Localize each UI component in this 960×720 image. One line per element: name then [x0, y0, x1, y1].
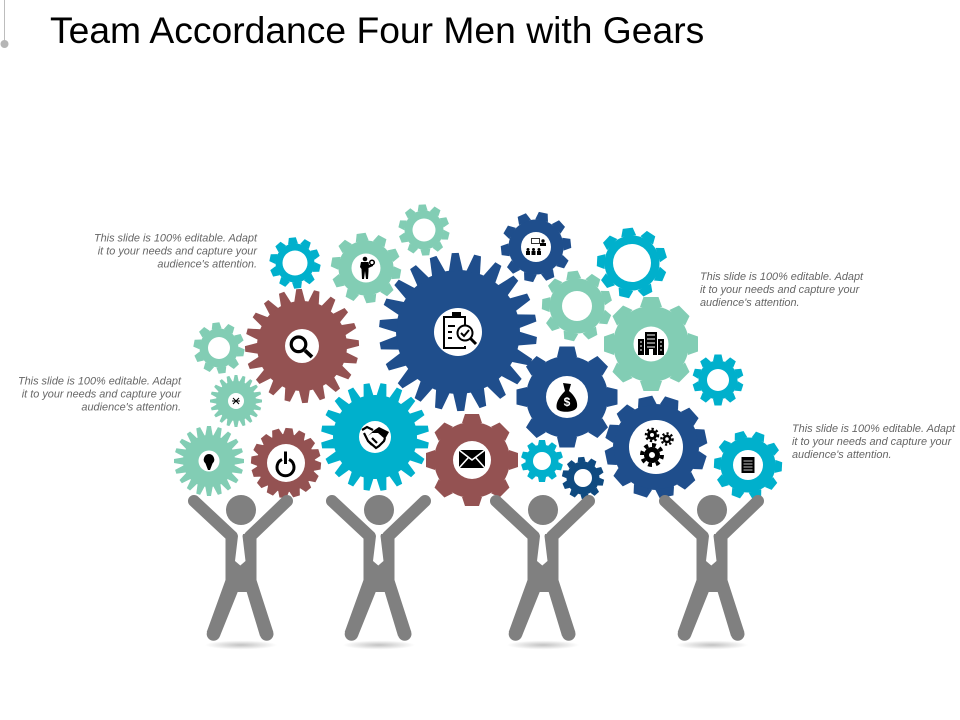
gear: small teal ring top left [267, 235, 323, 291]
gear: teal ring right [692, 354, 744, 406]
icon: three cogs [642, 429, 672, 465]
gear: green with light bulb [174, 426, 244, 496]
icon: money bag: $ [564, 395, 571, 409]
title: Team Accordance Four Men with Gears [50, 9, 704, 51]
text block: lower left: This slide is 100% editable. Adapt [18, 376, 182, 388]
icon: clipboard with check [444, 313, 476, 348]
shadow [676, 640, 748, 650]
text block: upper right: This slide is 100% editable. Adapt [700, 271, 864, 283]
shadow [507, 640, 579, 650]
figure [194, 495, 287, 641]
text block: upper left [94, 232, 258, 270]
man 2 [332, 495, 425, 650]
gear: green ring center right [537, 267, 617, 346]
text block: lower left: audience's attention. [81, 402, 181, 414]
text block: lower right: This slide is 100% editable. Adapt [792, 423, 956, 435]
icon: envelope [459, 450, 485, 468]
gear: green small with network icon [210, 375, 262, 427]
gear: brown with envelope [426, 414, 518, 506]
figure [665, 495, 758, 641]
gear: blue with money bag [516, 346, 618, 448]
gear: brown with magnifier [242, 286, 362, 406]
text block: upper right: audience's attention. [700, 297, 800, 309]
gear: small teal lower [521, 440, 563, 482]
icon: network [232, 398, 240, 404]
gear: brown with power symbol [248, 425, 324, 501]
text block: upper left: audience's attention. [157, 258, 257, 270]
gear: green ring top [396, 203, 452, 257]
corner marker [0, 0, 8, 48]
icon: presentation team [526, 238, 546, 255]
gear: small dark blue lower [560, 455, 606, 501]
text block: lower left: it to your needs and capture your [22, 388, 181, 400]
gear: teal with handshake [313, 375, 437, 499]
gear: green with building [604, 297, 698, 391]
shadow [343, 640, 415, 650]
text block: lower left [18, 376, 182, 414]
figure [496, 495, 589, 641]
icon: document list [742, 457, 754, 473]
figure [332, 495, 425, 641]
man 4 [665, 495, 758, 650]
text block: lower right [792, 423, 956, 461]
icon: light bulb [204, 454, 214, 470]
text block: lower right: audience's attention. [792, 449, 892, 461]
icon: magnifier [291, 337, 312, 357]
text block: lower right: it to your needs and capture your [792, 436, 952, 448]
icon: power [277, 452, 294, 476]
icon: building [638, 332, 664, 355]
icon: person with gear [360, 257, 374, 279]
man 3 [496, 495, 589, 650]
man 1 [194, 495, 287, 650]
text block: upper right: it to your needs and capture your [700, 284, 860, 296]
icon: handshake [362, 427, 389, 448]
text block: upper right [700, 271, 864, 309]
gear: green with person icon [326, 228, 406, 308]
gear: large blue with clipboard [376, 250, 540, 414]
text block: upper left: This slide is 100% editable. Adapt [94, 232, 258, 244]
gear: blue with team icon [494, 205, 578, 289]
shadow [205, 640, 277, 650]
text block: upper left: it to your needs and capture your [98, 246, 257, 258]
gear: blue with cogs [596, 387, 716, 507]
gear: teal with document [706, 423, 790, 507]
gear: green ring left [190, 320, 248, 376]
gear: teal ring top right [592, 224, 672, 303]
